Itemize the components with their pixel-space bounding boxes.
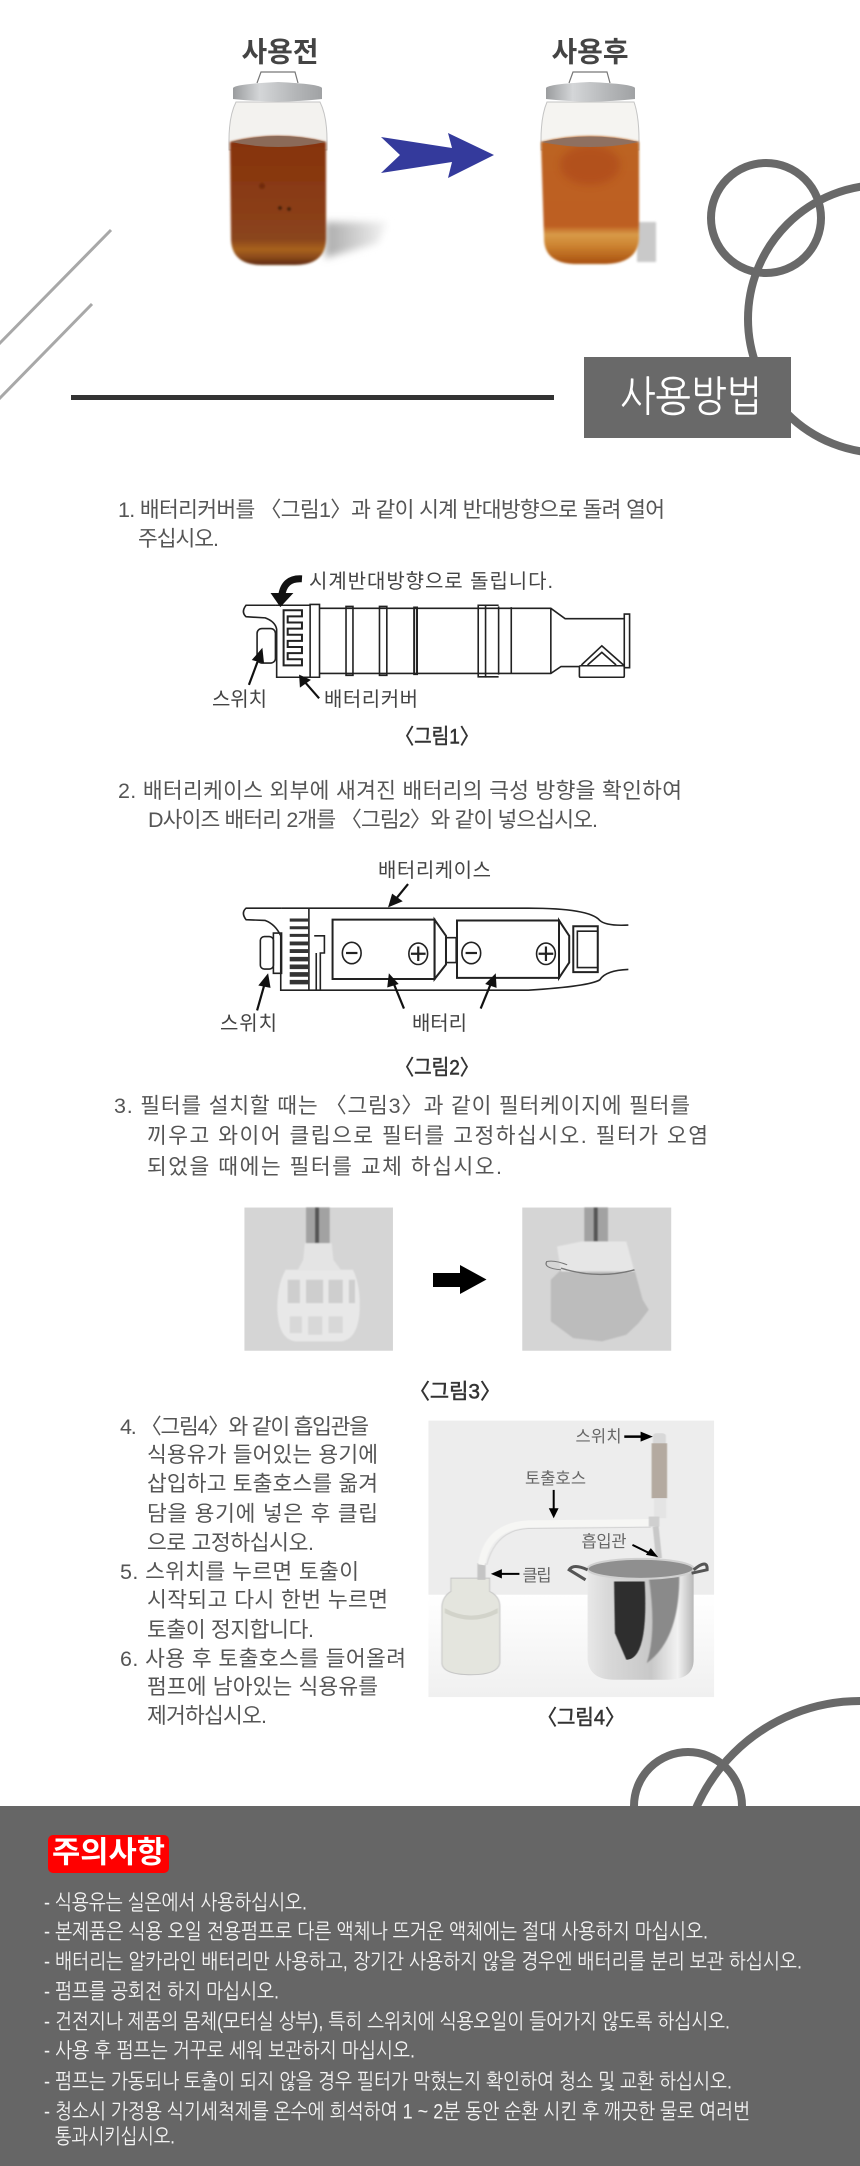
label: switch: 스위치 [220, 1012, 277, 1035]
photo: jar after use [541, 72, 656, 264]
caption figure 2: 〈그림2〉 [395, 1056, 479, 1080]
jar [442, 1563, 500, 1675]
steps 4 to 6 text: 삽입하고 토출호스를 옮겨 [147, 1472, 378, 1496]
steps 4 to 6 text: 5. 스위치를 누르면 토출이 [120, 1560, 359, 1584]
steps 4 to 6 text: 4. 〈그림4〉와 같이 흡입관을 [120, 1415, 369, 1439]
figure 1: pump with battery cover [212, 570, 630, 711]
label: battery: 배터리 [412, 1012, 467, 1035]
label: suction tube: 흡입관 [582, 1532, 626, 1551]
step 1 text: 주십시오. [138, 527, 219, 551]
section title: how to use [584, 357, 791, 438]
decorative diagonal lines [0, 230, 111, 399]
photo: filter cage [244, 1208, 393, 1351]
arrow: filter step [433, 1265, 486, 1294]
step 2 text [118, 779, 682, 832]
arrow: before to after [381, 133, 494, 178]
caution list: - 펌프를 공회전 하지 마십시오. [44, 1980, 279, 2004]
steps 4 to 6 text: 6. 사용 후 토출호스를 들어올려 [120, 1647, 406, 1671]
step 1 text [118, 498, 665, 551]
pump drawing 2 [243, 908, 628, 990]
battery polarity marks [342, 942, 555, 964]
steps 4 to 6 text: 제거하십시오. [147, 1704, 267, 1728]
badge: cautions heading: 주의사항 [52, 1836, 165, 1870]
photo: filter wrapped [522, 1208, 671, 1351]
step 1 text: 1. 배터리커버를 〈그림1〉과 같이 시계 반대방향으로 돌려 열어 [118, 498, 665, 522]
caution list: - 식용유는 실온에서 사용하십시오. [44, 1892, 307, 1914]
steps 4 to 6 text: 식용유가 들어있는 용기에 [147, 1443, 378, 1467]
arrow: counter-clockwise [271, 579, 302, 607]
label: battery case: 배터리케이스 [378, 859, 491, 882]
figure 2: pump with batteries [220, 859, 628, 1035]
caution list: - 본제품은 식용 오일 전용펌프로 다른 액체나 뜨거운 액체에는 절대 사용하지 마십시오. [44, 1920, 708, 1944]
caution list: - 건전지나 제품의 몸체(모터실 상부), 특히 스위치에 식용오일이 들어가지 않도록 하십시오. [44, 2010, 730, 2034]
arrow: switch 1 [249, 648, 264, 685]
arrows figure 2 [257, 884, 497, 1010]
caution list: - 펌프는 가동되나 토출이 되지 않을 경우 필터가 막혔는지 확인하여 청소 및 교환 하십시오. [44, 2070, 732, 2094]
step 2 text: D사이즈 배터리 2개를 〈그림2〉와 같이 넣으십시오. [148, 808, 598, 832]
caption figure 1: 〈그림1〉 [395, 726, 479, 748]
caution list: 통과시키십시오. [55, 2126, 175, 2148]
heading: before use: 사용전 [242, 36, 318, 68]
step 3 text: 되었을 때에는 필터를 교체 하십시오. [147, 1155, 502, 1179]
pot [569, 1559, 707, 1680]
hose and pump [481, 1433, 667, 1565]
steps 4 to 6 text: 으로 고정하십시오. [147, 1531, 314, 1555]
photo: pump setup with jar and pot [428, 1421, 714, 1697]
caption figure 3: 〈그림3〉 [409, 1380, 501, 1404]
decorative rings top right [711, 163, 860, 453]
heading: after use: 사용후 [552, 36, 628, 68]
photo: jar before use [229, 72, 387, 265]
caution list: - 청소시 가정용 식기세척제를 온수에 희석하여 1 ~ 2분 동안 순환 시킨 후 깨끗한 물로 여러번 [44, 2100, 750, 2124]
label: battery cover: 배터리커버 [324, 688, 418, 711]
step 3 text: 끼우고 와이어 클립으로 필터를 고정하십시오. 필터가 오염 [147, 1124, 708, 1148]
label: discharge hose: 토출호스 [525, 1469, 586, 1488]
caution list [44, 1892, 802, 2148]
steps 4 to 6 text: 토출이 정지합니다. [147, 1618, 314, 1642]
label: switch: 스위치 [576, 1427, 622, 1446]
decorative rings bottom right [634, 1701, 860, 2059]
step 3 text [114, 1094, 708, 1179]
step 2 text: 2. 배터리케이스 외부에 새겨진 배터리의 극성 방향을 확인하여 [118, 779, 682, 803]
panel: cautions [0, 1806, 860, 2166]
label: counter-clockwise: 시계반대방향으로 돌립니다. [309, 570, 553, 593]
pointer arrows [491, 1432, 658, 1578]
steps 4 to 6 text [120, 1415, 406, 1728]
section title: how to use: 사용방법 [620, 376, 762, 418]
step 3 text: 3. 필터를 설치할 때는 〈그림3〉과 같이 필터케이지에 필터를 [114, 1094, 690, 1118]
steps 4 to 6 text: 펌프에 남아있는 식용유를 [147, 1675, 378, 1699]
caption figure 4: 〈그림4〉 [537, 1706, 625, 1730]
heading rule [71, 395, 554, 400]
arrow: battery cover [299, 675, 319, 698]
pump drawing 1 [243, 604, 630, 677]
steps 4 to 6 text: 시작되고 다시 한번 누르면 [147, 1588, 388, 1612]
label: switch: 스위치 [212, 688, 267, 711]
steps 4 to 6 text: 담을 용기에 넣은 후 클립 [147, 1502, 378, 1526]
caution list: - 사용 후 펌프는 거꾸로 세워 보관하지 마십시오. [44, 2040, 415, 2062]
label: clip: 클립 [522, 1566, 552, 1585]
